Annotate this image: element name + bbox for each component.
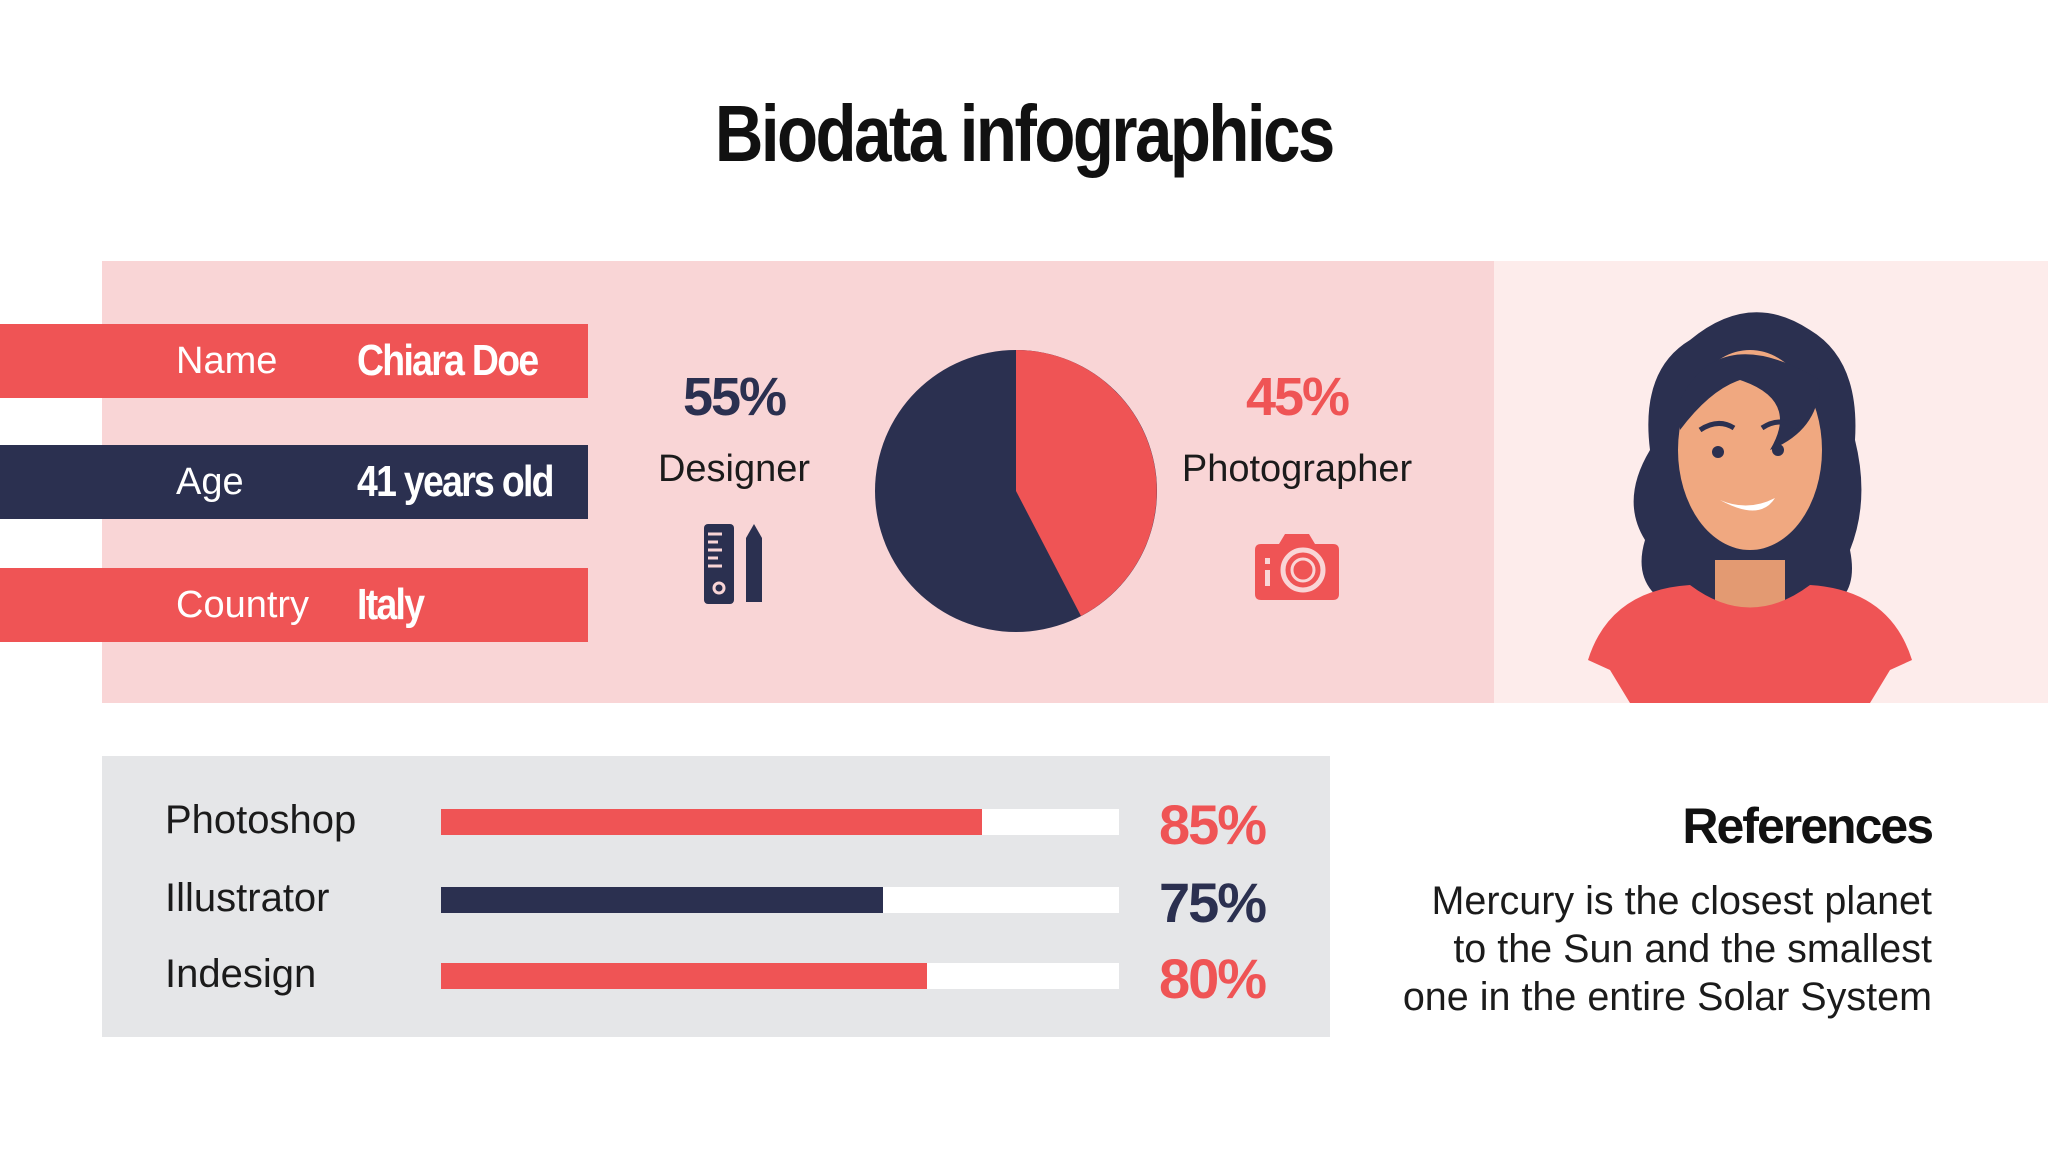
designer stat: Designer <box>658 448 810 490</box>
references: to the Sun and the smallest <box>1453 927 1932 971</box>
pie chart <box>875 350 1157 632</box>
photographer stat: Photographer <box>1182 448 1412 490</box>
references: one in the entire Solar System <box>1403 975 1932 1019</box>
title: Biodata infographics <box>715 89 1333 178</box>
skill: photoshop: Photoshop <box>165 798 356 842</box>
name bar <box>0 324 588 398</box>
age bar: 41 years old <box>357 457 553 506</box>
portrait illustration <box>1588 312 1912 703</box>
country bar: Italy <box>357 580 423 629</box>
designer stat: 55% <box>683 367 785 427</box>
name bar: Chiara Doe <box>357 336 537 385</box>
references: References <box>1682 798 1932 854</box>
skill: photoshop <box>165 793 1266 856</box>
panel: portrait background <box>1494 261 2048 703</box>
references: Mercury is the closest planet <box>1431 879 1932 923</box>
skill: illustrator: 75% <box>1159 871 1265 934</box>
skill: photoshop: 85% <box>1159 793 1265 856</box>
icon: camera <box>1255 534 1339 600</box>
name bar: Name <box>176 340 277 382</box>
photographer stat <box>1182 367 1412 490</box>
age bar <box>0 445 588 519</box>
skill: illustrator: Illustrator <box>165 876 330 920</box>
skill: indesign: Indesign <box>165 952 316 996</box>
skill: indesign <box>165 947 1266 1010</box>
panel: skills <box>102 756 1330 1037</box>
designer stat <box>658 367 810 490</box>
references <box>1403 798 1932 1019</box>
icon: ruler and pencil <box>704 524 762 604</box>
skill: indesign: 80% <box>1159 947 1265 1010</box>
country bar: Country <box>176 584 309 626</box>
panel: pink background <box>102 261 1494 703</box>
country bar <box>0 568 588 642</box>
age bar: Age <box>176 461 244 503</box>
photographer stat: 45% <box>1246 367 1348 427</box>
skill: illustrator <box>165 871 1266 934</box>
